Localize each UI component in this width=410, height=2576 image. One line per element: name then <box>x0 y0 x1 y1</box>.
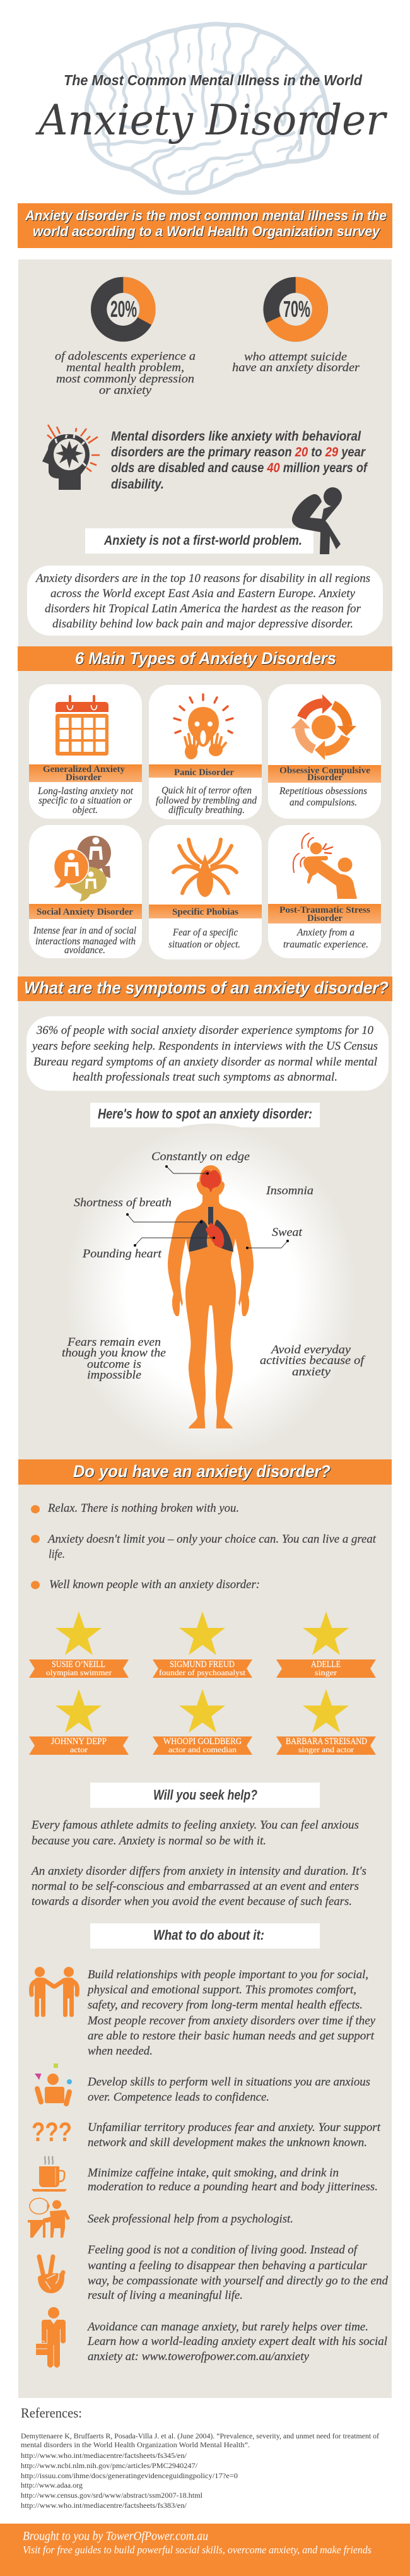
label strip: Disorder <box>66 773 102 783</box>
bullet: well known people: Well known people with an anxiety disorder: <box>49 1578 260 1591</box>
badge: barbara streisand: singer and actor <box>298 1745 354 1754</box>
chart: 70% donut: 70% <box>283 296 310 322</box>
text: reference list: http://www.census.gov/srd/www/abstract/ssm2007-18.html <box>21 2492 202 2500</box>
text: avoidance: anxiety at: www.towerofpower.com.au/anxiety <box>88 2350 310 2363</box>
label: insomnia: Insomnia <box>266 1184 313 1197</box>
label: sweat: Sweat <box>272 1226 303 1239</box>
badge: susie o'neill: SUSIE O’NEILL <box>52 1659 105 1670</box>
badge: johnny depp: JOHNNY DEPP <box>51 1736 107 1747</box>
label strip <box>149 905 262 918</box>
icon: question marks: ??? <box>32 2117 72 2147</box>
text: reference list: http://www.ncbi.nlm.nih.gov/pmc/articles/PMC2940247/ <box>21 2462 198 2470</box>
card: social anxiety disorder <box>29 825 142 958</box>
label: pounding heart: Pounding heart <box>82 1247 162 1261</box>
panel: disability text card: Anxiety disorders are in the top 10 reasons for disability in all regions <box>35 572 370 585</box>
text: adolescents stat: most commonly depression <box>56 372 194 386</box>
text: adolescents stat: of adolescents experience a <box>55 350 196 363</box>
panel: disability text card <box>27 566 383 636</box>
text: adolescents stat: or anxiety <box>99 384 152 397</box>
label: sweat <box>246 1226 303 1249</box>
badge: barbara streisand <box>276 1689 376 1755</box>
description <box>283 927 368 950</box>
description: Repetitious obsessions <box>279 786 367 797</box>
panel: symptoms text card: Bureau regard symptoms of an anxiety disorder as normal while mental <box>33 1055 377 1069</box>
description: and compulsions. <box>290 797 357 808</box>
icon: circular arrows <box>291 694 356 760</box>
icon: person talking across a desk <box>28 2198 70 2238</box>
callout: will you seek help <box>90 1783 320 1808</box>
figure: human body with organs <box>168 1165 254 1428</box>
text: build relationships: are able to restore their basic human needs and get support <box>88 2029 375 2043</box>
label strip: Panic Disorder <box>174 768 234 778</box>
text: develop skills: Develop skills to perform well in situations you are anxious <box>87 2075 370 2089</box>
icon: sitting person with head in hands <box>292 487 342 554</box>
label: shortness of breath: Shortness of breath <box>74 1196 172 1209</box>
label strip: Generalized Anxiety <box>43 764 125 775</box>
badge: johnny depp: actor <box>70 1745 88 1754</box>
label strip <box>29 904 142 919</box>
panel: symptoms text card <box>26 1016 389 1091</box>
text: build relationships: physical and emotional support. This promotes comfort, <box>86 1983 356 1997</box>
label strip: Social Anxiety Disorder <box>37 907 133 917</box>
banner: intro: world according to a World Health Organization survey <box>33 223 381 239</box>
description: Fear of a specific <box>172 927 238 938</box>
description: followed by trembling and <box>156 795 257 806</box>
text: reference list: http://www.who.int/mediacentre/factsheets/fs345/en/ <box>21 2452 187 2460</box>
badge: sigmund freud: SIGMUND FREUD <box>170 1659 235 1670</box>
label: avoid everyday activities: activities because of <box>260 1354 366 1367</box>
text: suicide stat <box>232 350 360 374</box>
banner: intro <box>18 203 392 248</box>
description <box>156 785 257 816</box>
badge: adelle: singer <box>315 1668 337 1677</box>
text: minimize caffeine: Minimize caffeine intake, quit smoking, and drink in <box>87 2166 339 2180</box>
organ: brain <box>201 1170 221 1192</box>
description: interactions managed with <box>35 936 136 947</box>
description: Quick hit of terror often <box>161 785 252 796</box>
icon: coffee cup <box>32 2156 67 2192</box>
text: differs from anxiety: normal to be self-conscious and embarrassed at an event and enters <box>32 1880 359 1893</box>
text: build relationships: when needed. <box>88 2045 153 2058</box>
label: shortness of breath <box>74 1196 202 1223</box>
icon: head with burst <box>42 425 100 490</box>
panel: disability text card: disorders hit Tropical Latin America the hardest as the reason for <box>45 602 361 615</box>
bullet: anxiety doesn't limit you: life. <box>49 1548 65 1561</box>
description: Intense fear in and of social <box>33 925 136 936</box>
badge: susie o'neill <box>29 1611 129 1678</box>
label: avoid everyday activities: Avoid everyday <box>270 1343 351 1356</box>
description <box>279 786 367 808</box>
footer: Brought to you by TowerOfPower.com.au <box>23 2529 208 2543</box>
title: the most common mental illness: The Most Common Mental Illness in the World <box>64 72 363 88</box>
text: unfamiliar territory: network and skill development makes the unknown known. <box>88 2136 367 2149</box>
badge: sigmund freud <box>153 1611 252 1678</box>
label strip: Obsessive Compulsive <box>279 766 370 776</box>
label strip: Disorder <box>307 773 343 783</box>
description: Anxiety from a <box>296 927 354 938</box>
bullet: relax: Relax. There is nothing broken with you. <box>47 1502 239 1515</box>
panel: disability text card: across the World except East Asia and Eastern Europe. Anxiety <box>50 587 356 600</box>
text: build relationships <box>86 1968 376 2058</box>
text: develop skills: over. Competence leads to confidence. <box>88 2091 269 2104</box>
label: fears remain: outcome is <box>87 1358 141 1371</box>
card: panic disorder <box>149 685 262 819</box>
organ: lungs <box>189 1207 233 1252</box>
footer <box>0 2524 410 2576</box>
text: differs from anxiety: towards a disorder when you avoid the event because of such fears. <box>32 1895 352 1908</box>
text: adolescents stat: mental health problem, <box>66 361 184 374</box>
text: reference list: mental disorders in the World Health Organization World Mental Health”. <box>21 2442 250 2449</box>
footer: Visit for free guides to build powerful social skills, overcome anxiety, and make friends <box>23 2544 372 2556</box>
description <box>168 927 240 950</box>
banner: 6 main types <box>18 646 392 671</box>
text: feeling good <box>87 2243 388 2302</box>
label: avoid everyday activities: anxiety <box>292 1365 331 1379</box>
badge: whoopi goldberg <box>153 1689 252 1755</box>
text: differs from anxiety <box>30 1865 366 1908</box>
text: build relationships: Build relationships with people important to you for social, <box>88 1968 368 1981</box>
description: avoidance. <box>64 945 105 956</box>
chart: 20% donut <box>91 277 156 341</box>
badge: whoopi goldberg: actor and comedian <box>168 1745 237 1754</box>
icon: speech bubbles with people <box>54 836 111 901</box>
label: pounding heart <box>82 1237 215 1261</box>
bullet: anxiety doesn't limit you: Anxiety doesn't limit you – only your choice can. You can live a great <box>47 1533 377 1546</box>
text: reference list: http://www.adaa.org <box>21 2482 83 2490</box>
panel: symptoms text card: years before seeking help. Respondents in interviews with the US Census <box>31 1040 378 1053</box>
description: traumatic experience. <box>283 939 368 950</box>
banner: symptoms: What are the symptoms of an anxiety disorder? <box>24 978 389 997</box>
icon: calendar <box>56 696 108 756</box>
label: fears remain: Fears remain even <box>67 1336 161 1349</box>
icon: brain illustration <box>86 24 328 193</box>
text: reference list: http://issuu.com/ihme/docs/generatingevidenceguidingpolicy/17?e=0 <box>21 2472 238 2480</box>
callout: not a first-world problem <box>85 528 313 554</box>
text: differs from anxiety: An anxiety disorder differs from anxiety in intensity and duration. It's <box>30 1865 366 1878</box>
badge: barbara streisand: BARBARA STREISAND <box>286 1736 367 1747</box>
text: famous athletes: Every famous athlete admits to feeling anxiety. You can feel anxious <box>31 1819 359 1832</box>
label strip: Post-Traumatic Stress <box>279 905 370 915</box>
text: build relationships: safety, and recovery from long-term mental health effects. <box>88 1998 363 2012</box>
panel: main background <box>18 259 392 2398</box>
callout: how to spot <box>90 1103 320 1127</box>
panel: symptoms text card: 36% of people with social anxiety disorder experience symptoms for 10 <box>36 1024 373 1037</box>
callout: how to spot: Here's how to spot an anxiety disorder: <box>98 1106 312 1122</box>
text: feeling good: wanting a feeling to disappear then behaving a particular <box>88 2259 368 2272</box>
label: constantly on edge <box>151 1150 250 1175</box>
heading: references: References: <box>21 2405 82 2421</box>
badge: adelle <box>276 1611 376 1678</box>
description: object. <box>73 805 98 816</box>
chart: 20% donut: 20% <box>110 296 137 322</box>
badge: adelle: ADELLE <box>311 1659 341 1670</box>
text: feeling good: result of living a meaningful life. <box>88 2289 243 2302</box>
label strip: Disorder <box>307 913 343 923</box>
text: mental disorders fact: disability. <box>111 477 164 492</box>
title: anxiety disorder: Anxiety Disorder <box>35 96 387 145</box>
text: feeling good: Feeling good is not a condition of living good. Instead of <box>87 2243 359 2257</box>
text: adolescents stat <box>55 350 196 397</box>
text: mental disorders fact: Mental disorders like anxiety with behavioral <box>111 429 361 444</box>
description: difficulty breathing. <box>168 805 245 816</box>
text: minimize caffeine <box>87 2166 378 2193</box>
card: post-traumatic stress disorder <box>268 825 381 958</box>
icon: screaming face <box>174 694 233 759</box>
card: generalized anxiety disorder <box>29 684 142 819</box>
text: suicide stat: have an anxiety disorder <box>232 361 360 374</box>
description: situation or object. <box>168 939 240 950</box>
text: develop skills <box>87 2075 370 2104</box>
description <box>37 786 134 816</box>
label: fears remain: though you know the <box>62 1346 166 1360</box>
callout: what to do about it <box>90 1923 320 1949</box>
text: avoidance: Learn how a world-leading anxiety expert dealt with his social <box>87 2335 387 2348</box>
text: minimize caffeine: moderation to reduce a pounding heart and body jitteriness. <box>88 2180 378 2193</box>
label strip: Specific Phobias <box>172 907 238 917</box>
text: unfamiliar territory: Unfamiliar territory produces fear and anxiety. Your support <box>88 2121 381 2134</box>
label strip <box>149 764 262 778</box>
text: famous athletes <box>31 1819 359 1848</box>
bullet: anxiety doesn't limit you <box>31 1533 377 1561</box>
badge: johnny depp <box>29 1689 129 1755</box>
label strip <box>268 765 381 783</box>
icon: child thrown in air <box>293 833 357 899</box>
text: build relationships: Most people recover from anxiety disorders over time if they <box>87 2014 376 2027</box>
banner: 6 main types: 6 Main Types of Anxiety Disorders <box>75 649 336 668</box>
description: specific to a situation or <box>38 795 132 806</box>
description <box>33 925 136 956</box>
card: specific phobias <box>149 825 262 959</box>
label: fears remain: impossible <box>87 1368 141 1382</box>
text: seek professional help: Seek professional help from a psychologist. <box>88 2212 293 2226</box>
banner: do you have an anxiety disorder: Do you have an anxiety disorder? <box>73 1462 331 1481</box>
icon: person juggling shapes <box>35 2063 72 2104</box>
text: reference list: Demyttenaere K, Bruffaerts R, Posada-Villa J. et al. (June 2004). “Prevalence, severity, and unmet need for treatment of <box>21 2433 379 2440</box>
text: mental disorders fact: disorders are the primary reason 20 to 29 year <box>111 445 366 460</box>
callout: what to do about it: What to do about it: <box>153 1927 264 1943</box>
label: fears remain <box>62 1336 166 1382</box>
icon: spider <box>173 840 237 897</box>
label: constantly on edge: Constantly on edge <box>151 1150 250 1163</box>
text: avoidance: Avoidance can manage anxiety, but rarely helps over time. <box>86 2320 368 2334</box>
chart: 70% donut <box>263 277 328 341</box>
label strip <box>29 764 142 783</box>
panel: disability text card: disability behind low back pain and major depressive disorder. <box>52 617 353 631</box>
description: Long-lasting anxiety not <box>37 786 134 797</box>
banner: do you have an anxiety disorder <box>18 1459 392 1485</box>
callout: will you seek help: Will you seek help? <box>153 1787 257 1803</box>
badge: susie o'neill: olympian swimmer <box>46 1668 112 1677</box>
text: mental disorders fact: olds are disabled and cause 40 million years of <box>111 461 368 475</box>
text: mental disorders fact <box>111 429 368 492</box>
text: unfamiliar territory <box>88 2121 381 2149</box>
icon: peace hand <box>38 2257 64 2293</box>
text: suicide stat: who attempt suicide <box>244 350 347 364</box>
glow behind body <box>64 1124 357 1458</box>
banner: intro: Anxiety disorder is the most common mental illness in the <box>25 208 387 223</box>
callout: not a first-world problem: Anxiety is not a first-world problem. <box>103 533 302 548</box>
card: obsessive compulsive disorder <box>268 684 381 819</box>
organ: heart <box>206 1223 224 1248</box>
text: avoidance <box>86 2320 387 2363</box>
icon: two people shaking hands <box>32 1967 77 2015</box>
label strip <box>268 904 381 923</box>
label: avoid everyday activities <box>260 1343 366 1379</box>
text: famous athletes: because you care. Anxiety is normal so be with it. <box>32 1834 266 1848</box>
text: feeling good: way, be compassionate with yourself and directly go to the end <box>88 2274 388 2288</box>
panel: symptoms text card: health professionals treat such symptoms as abnormal. <box>73 1071 337 1084</box>
badge: sigmund freud: founder of psychoanalyst <box>159 1668 245 1677</box>
text: reference list: http://www.who.int/mediacentre/factsheets/fs383/en/ <box>21 2502 187 2510</box>
text: reference list <box>21 2433 379 2510</box>
icon: businessman with briefcase <box>36 2307 66 2368</box>
badge: whoopi goldberg: WHOOPI GOLDBERG <box>163 1736 242 1747</box>
